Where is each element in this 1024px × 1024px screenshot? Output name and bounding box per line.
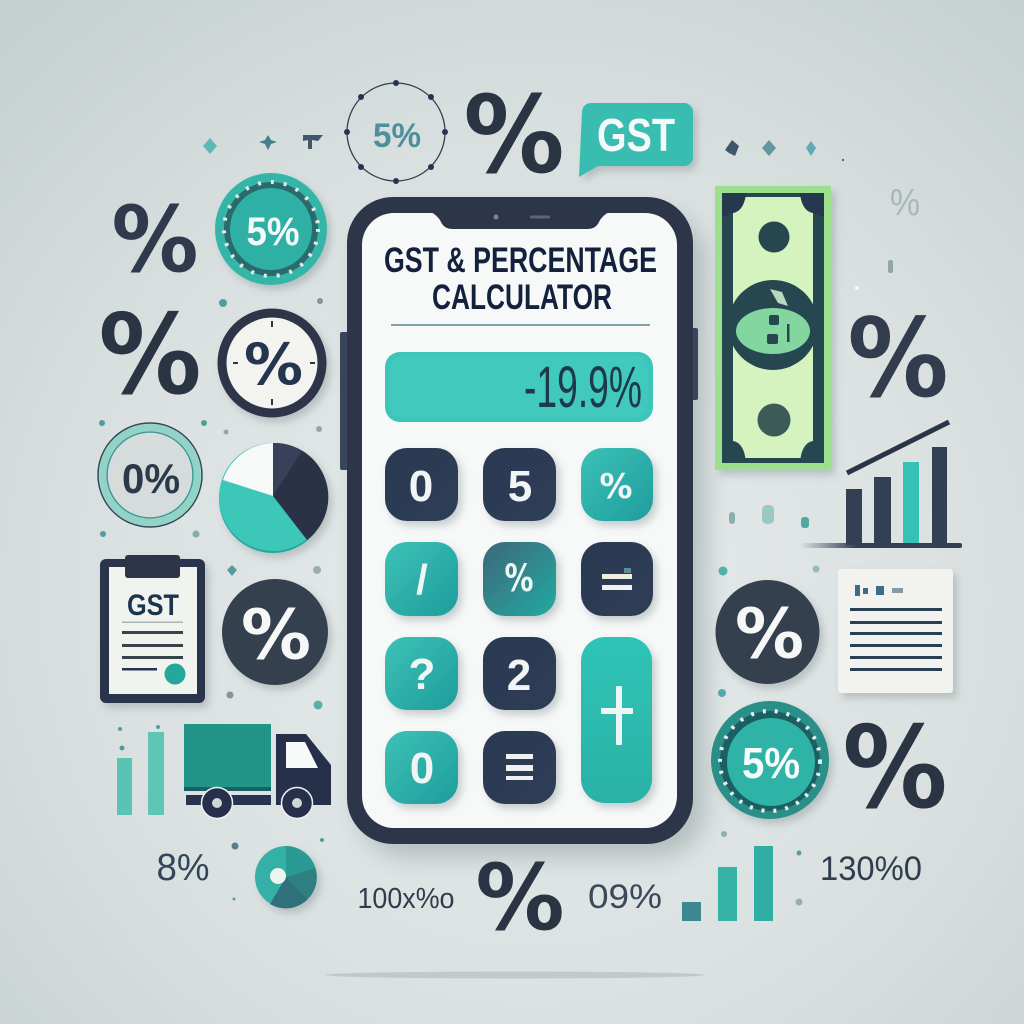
icon: GST speech bubble — [579, 103, 693, 177]
calculator buttons: 2 — [507, 651, 531, 700]
calculator buttons: / — [416, 556, 428, 603]
chart: bars with trend right — [800, 422, 962, 548]
icon: percent dark circle right: % — [735, 594, 804, 674]
calculator buttons — [385, 448, 653, 804]
icon: percent dark circle left — [222, 579, 328, 685]
calculator buttons: 0 — [410, 744, 434, 793]
icon: percent dark circle right — [716, 580, 820, 684]
icon: percent dark circle left: % — [241, 596, 311, 676]
icon: 5% teal badge: 5% — [246, 210, 300, 254]
heading: calculator title: CALCULATOR — [432, 278, 612, 317]
icon: percent left 2: % — [98, 291, 202, 420]
icon: GST clipboard: GST — [127, 589, 179, 622]
icon: small percent top right: % — [890, 182, 920, 224]
icon: 5% teal badge — [215, 173, 327, 285]
calculator buttons: % — [504, 557, 534, 600]
label: 8%: 8% — [156, 847, 210, 889]
icon: 0% ring — [98, 423, 202, 527]
calculator display — [385, 352, 653, 422]
heading: calculator title: GST & PERCENTAGE — [384, 241, 657, 280]
icon: GST speech bubble: GST — [597, 109, 675, 161]
icon: 0% ring: 0% — [122, 455, 180, 502]
icon: large percent top: % — [464, 74, 564, 198]
icon: GST clipboard — [100, 555, 205, 703]
decorative dots — [99, 135, 893, 906]
icon: percent circle outline — [222, 313, 322, 413]
calculator buttons: ? — [409, 650, 435, 699]
calculator display: -19.9% — [524, 355, 642, 420]
chart: pie — [219, 443, 328, 553]
label: 100x%o: 100x%o — [358, 883, 454, 915]
icon: teal circle — [255, 846, 317, 908]
label: 09%: 09% — [588, 878, 662, 916]
icon: percent right 2: % — [842, 702, 948, 834]
icon: percent bottom: % — [476, 846, 564, 951]
icon: percent right 1: % — [848, 295, 948, 422]
icon: percent left 1: % — [112, 188, 198, 293]
label: 130%0: 130%0 — [820, 850, 922, 888]
icon: percent circle outline: % — [244, 332, 303, 398]
calculator buttons: 5 — [508, 462, 532, 511]
calculator buttons: % — [600, 467, 632, 507]
icon: 5% dotted ring: 5% — [373, 117, 421, 155]
panel: phone calculator — [340, 197, 698, 844]
icon: document right — [838, 569, 953, 693]
chart: small bars bottom — [682, 846, 773, 921]
icon: 5% teal badge right: 5% — [742, 739, 800, 788]
calculator buttons: 0 — [409, 462, 433, 511]
icon: delivery truck — [184, 724, 331, 818]
heading: calculator title — [384, 241, 657, 317]
icon: banknote — [715, 186, 831, 470]
icon: 5% teal badge right — [711, 701, 829, 819]
icon: 5% dotted ring — [344, 80, 448, 184]
chart: small bars left — [117, 732, 164, 815]
